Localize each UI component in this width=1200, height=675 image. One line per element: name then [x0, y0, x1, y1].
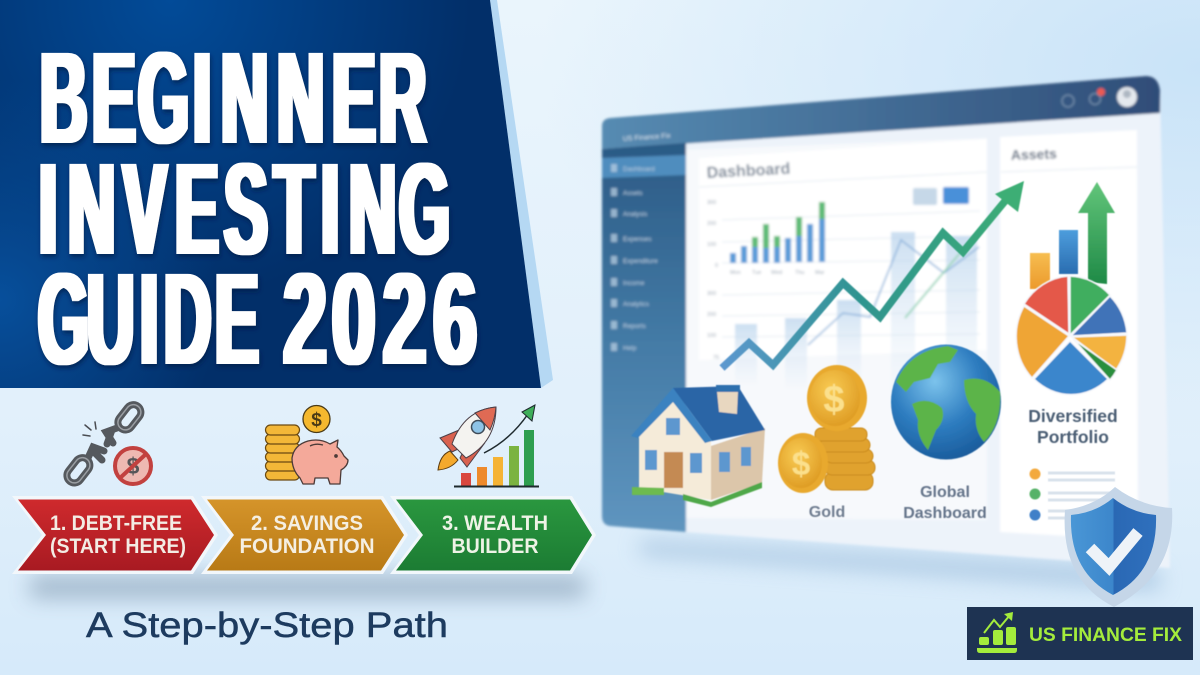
logo badge — [967, 607, 1193, 660]
label: diversified portfolio: Portfolio — [1037, 427, 1109, 447]
main card: Thu — [795, 270, 804, 276]
main card: Mon — [730, 270, 741, 276]
icon: gold coins: $ — [823, 379, 845, 421]
step 1: debt-free: 1. DEBT-FREE — [50, 512, 182, 535]
label: global dashboard — [903, 484, 987, 522]
icon: broken chain with no-debt sign — [64, 402, 151, 486]
main card — [686, 138, 987, 520]
icon: no-debt sign: $ — [127, 453, 140, 479]
label: diversified portfolio: Diversified — [1028, 406, 1118, 426]
step 2: savings foundation: FOUNDATION — [240, 535, 374, 558]
label: global dashboard: Global — [920, 484, 970, 501]
header bar: US Finance Fix — [623, 133, 671, 143]
sidebar: Assets — [623, 190, 643, 197]
main card: Dashboard — [706, 161, 791, 182]
bar chart: monthly — [730, 202, 825, 263]
title — [38, 24, 477, 392]
label: diversified portfolio — [1028, 406, 1118, 447]
sidebar: Reports — [623, 323, 647, 330]
title: BEGINNER — [40, 24, 426, 171]
bars and green arrow — [1030, 182, 1115, 289]
icon: house — [631, 385, 765, 507]
step 2: savings foundation — [201, 496, 408, 574]
assets card: Assets — [1011, 145, 1057, 163]
shadow under steps — [30, 576, 585, 598]
main card: 100 — [707, 242, 716, 248]
subtitle: A Step-by-Step Path — [86, 606, 448, 645]
pie chart: diversified portfolio — [1016, 276, 1127, 395]
main card: 200 — [707, 312, 716, 318]
legend — [1030, 468, 1115, 520]
sidebar: Dashboard — [623, 166, 655, 173]
panel: title banner — [0, 0, 553, 392]
icon: logo chart — [977, 612, 1017, 653]
toggle buttons — [913, 187, 969, 205]
sidebar: Expenses — [623, 236, 652, 243]
icon: rocket and growth chart — [438, 405, 539, 488]
title: 2026 — [283, 245, 477, 392]
step 1: debt-free — [12, 496, 218, 574]
icon: gold coins — [778, 365, 875, 493]
sidebar: Income — [623, 280, 645, 287]
icon: piggy bank — [292, 440, 348, 484]
sidebar: Help — [623, 345, 637, 352]
main card: 75 — [713, 355, 719, 361]
sidebar: Expenditure — [623, 258, 658, 265]
chart arrow: upward trend — [722, 181, 1024, 368]
label: global dashboard: Dashboard — [903, 505, 987, 522]
title: INVESTING — [39, 135, 450, 282]
step 1: debt-free: (START HERE) — [50, 535, 186, 558]
main card: 200 — [707, 221, 716, 227]
sidebar: Analysis — [623, 211, 648, 218]
icon: coins and piggy bank — [266, 406, 348, 484]
label: gold: Gold — [809, 504, 845, 521]
arrow: growth trend — [484, 405, 535, 453]
step 3: wealth builder — [390, 496, 596, 574]
panel: blurred dashboard — [602, 76, 1170, 590]
main card: 100 — [707, 333, 716, 339]
main card: 0 — [715, 263, 718, 269]
dashboard window — [602, 76, 1170, 568]
icon: gold coins: $ — [792, 445, 810, 482]
logo text: US FINANCE FIX — [1029, 625, 1182, 646]
header bar — [602, 76, 1160, 149]
sidebar: Analytics — [623, 301, 650, 308]
icon: shield with check — [1065, 487, 1172, 607]
main card: Tue — [752, 270, 761, 276]
panel: step path — [12, 496, 596, 598]
title: GUIDE — [38, 245, 259, 392]
assets card — [1000, 130, 1138, 540]
step 3: wealth builder: 3. WEALTH — [442, 512, 548, 535]
main card: Wed — [771, 270, 782, 276]
icon: gold dollar coin: $ — [311, 410, 322, 431]
dashboard shadow — [640, 540, 1160, 590]
main card: Mar — [815, 270, 825, 276]
bar chart: growth — [454, 430, 539, 488]
main card: 300 — [707, 291, 716, 297]
icon: globe — [891, 344, 1001, 460]
icon: rocket flame — [438, 451, 458, 470]
area chart — [735, 232, 979, 396]
step 3: wealth builder: BUILDER — [452, 535, 538, 558]
sidebar — [602, 143, 686, 532]
icon: rocket — [440, 407, 496, 467]
main card: 300 — [707, 200, 716, 206]
step 2: savings foundation: 2. SAVINGS — [251, 512, 363, 535]
